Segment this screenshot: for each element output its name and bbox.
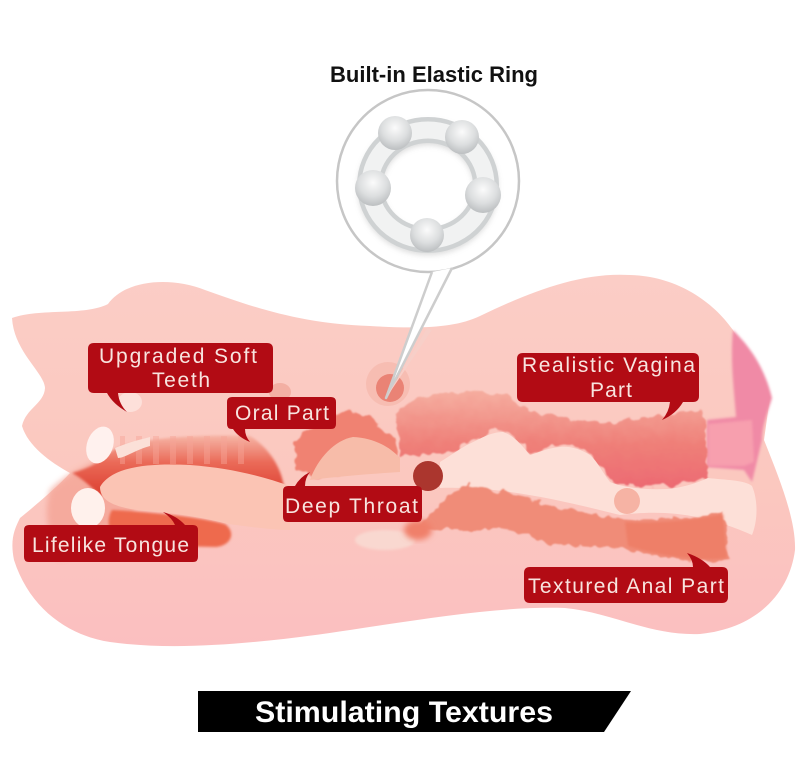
deep throat ridges bbox=[310, 437, 400, 480]
anal entrance pocks bbox=[355, 530, 415, 550]
tongue bbox=[100, 464, 290, 530]
ring callout bbox=[337, 90, 519, 398]
heading: built-in elastic ring: Built-in Elastic Ring bbox=[330, 62, 538, 87]
mouth canal bbox=[72, 436, 285, 495]
callout pointer bbox=[386, 268, 452, 398]
label: realistic vagina part: Part bbox=[590, 379, 632, 402]
label: lifelike tongue bbox=[24, 512, 198, 562]
anal canal bbox=[417, 485, 728, 562]
label: textured anal part bbox=[524, 553, 728, 603]
label: lifelike tongue: Lifelike Tongue bbox=[32, 534, 189, 557]
label: oral part: Oral Part bbox=[235, 402, 329, 425]
soft teeth bbox=[71, 383, 291, 528]
icon: elastic ring with beads bbox=[355, 116, 501, 252]
lip glow bbox=[47, 460, 140, 560]
banner: stimulating textures bbox=[198, 691, 631, 732]
label: realistic vagina part bbox=[517, 353, 699, 420]
inner pale region bbox=[440, 432, 756, 535]
product cross-section body bbox=[12, 275, 795, 646]
throat ball bbox=[413, 461, 443, 491]
upper ridges bbox=[120, 436, 255, 464]
banner: stimulating textures: Stimulating Textures bbox=[255, 696, 553, 729]
label: deep throat: Deep Throat bbox=[285, 495, 418, 518]
throat patch bbox=[295, 411, 398, 478]
insertion hole bbox=[366, 362, 410, 406]
upper canal bbox=[396, 392, 708, 487]
label: realistic vagina part: Realistic Vagina bbox=[522, 354, 695, 377]
label: deep throat bbox=[283, 472, 422, 522]
magnifier circle bbox=[337, 90, 519, 272]
label: upgraded soft teeth bbox=[88, 343, 273, 412]
label: oral part bbox=[227, 397, 336, 442]
small nub bbox=[614, 488, 640, 514]
label: upgraded soft teeth: Upgraded Soft bbox=[99, 345, 257, 368]
pink end cap bbox=[707, 330, 772, 482]
label: textured anal part: Textured Anal Part bbox=[528, 575, 724, 598]
tongue underside bbox=[109, 510, 231, 547]
label: upgraded soft teeth: Teeth bbox=[152, 369, 210, 392]
pointer lower part over the body bbox=[386, 328, 432, 398]
